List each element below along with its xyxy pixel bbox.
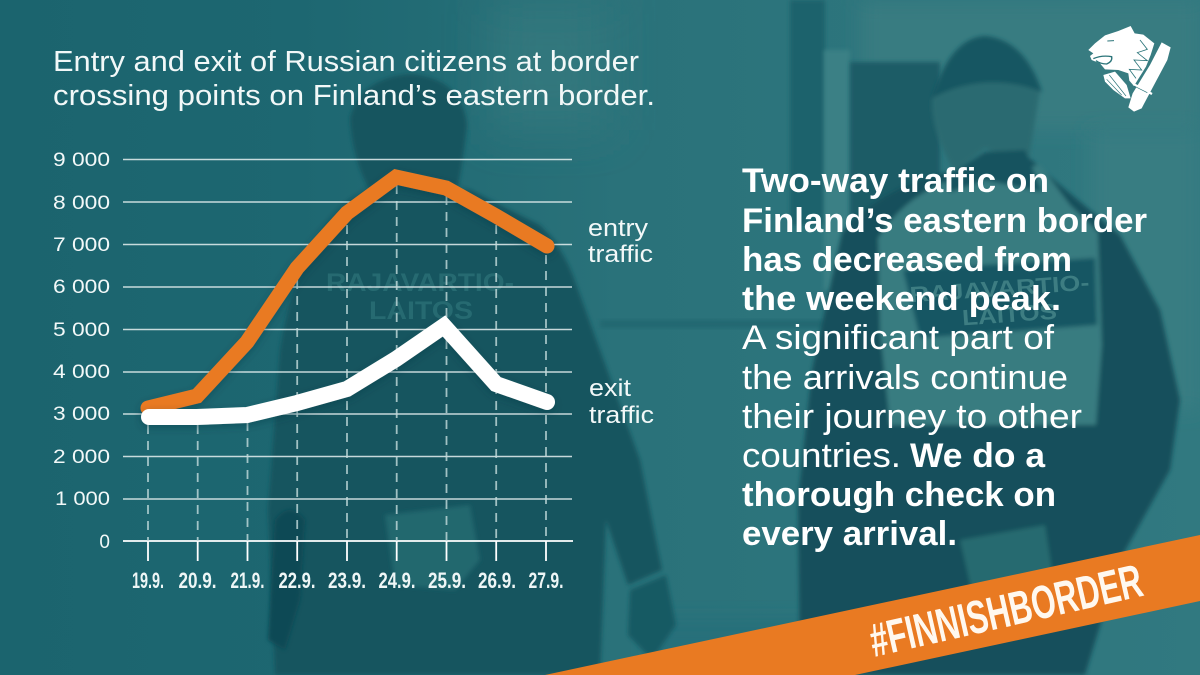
exit traffic line — [149, 326, 547, 417]
hashtag banner — [545, 535, 1200, 675]
main message text: countries. — [742, 437, 901, 475]
date labels: 20.9. — [178, 568, 216, 593]
background photo: duotone border guards: LAITOS — [369, 297, 473, 325]
series label: entry traffic — [588, 215, 653, 268]
y-axis labels: 1 000 — [55, 489, 110, 510]
series label: exit traffic — [589, 375, 654, 429]
main message text: has decreased from — [742, 241, 1072, 279]
main message text: their journey to other — [742, 398, 1082, 436]
date labels: 27.9. — [528, 568, 564, 593]
date labels — [132, 568, 564, 593]
date labels: 22.9. — [278, 568, 316, 593]
y-axis labels: 9 000 — [53, 150, 110, 171]
y-axis labels: 4 000 — [53, 362, 110, 383]
chart title: crossing points on Finland’s eastern border. — [53, 80, 655, 112]
main message text: every arrival. — [742, 515, 957, 553]
y-axis labels: 7 000 — [53, 235, 110, 256]
date labels: 24.9. — [378, 568, 416, 593]
y-axis labels: 2 000 — [53, 447, 110, 468]
main message text: Finland’s eastern border — [742, 202, 1147, 240]
series label: entry traffic: entry — [588, 215, 648, 242]
y-axis labels: 3 000 — [53, 404, 110, 425]
guard equipment — [268, 505, 480, 650]
background photo: duotone border guards: LAITOS — [961, 299, 1058, 330]
faint uniform lettering: RAJAVARTIO- — [326, 269, 514, 297]
main message text: the weekend peak. — [742, 280, 1061, 318]
left guard — [268, 74, 676, 675]
y-axis labels: 0 — [99, 532, 110, 553]
date labels: 25.9. — [428, 568, 466, 593]
y-axis labels: 8 000 — [53, 193, 110, 214]
main message text: Two-way traffic on — [742, 162, 1049, 200]
chart title — [53, 46, 655, 112]
main message text: A significant part of — [742, 319, 1055, 357]
main message text — [742, 162, 1147, 553]
series label: entry traffic: traffic — [588, 241, 653, 268]
y-axis labels — [53, 150, 110, 553]
logo: border guard bear and sword — [1088, 26, 1171, 112]
background photo: duotone border guards: RAJAVARTIO- — [909, 270, 1090, 307]
entry traffic line — [148, 177, 547, 408]
y-axis labels: 6 000 — [53, 277, 110, 298]
y-axis labels: 5 000 — [53, 320, 110, 341]
main message text: the arrivals continue — [742, 359, 1068, 397]
right guard — [798, 36, 1180, 675]
date labels: 19.9. — [132, 568, 164, 593]
main message text: We do a — [910, 437, 1046, 475]
series label: exit traffic: exit — [589, 375, 631, 402]
chart title: Entry and exit of Russian citizens at border — [53, 46, 639, 78]
date labels: 26.9. — [478, 568, 516, 593]
series label: exit traffic: traffic — [589, 402, 654, 429]
main message text: thorough check on — [742, 476, 1056, 514]
date labels: 21.9. — [230, 568, 264, 593]
line chart: entry and exit traffic — [53, 150, 654, 593]
date labels: 23.9. — [328, 568, 366, 593]
